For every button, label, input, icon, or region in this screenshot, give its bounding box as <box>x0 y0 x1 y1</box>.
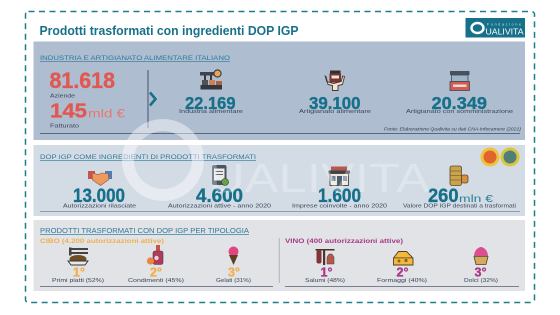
stat: valore DOP IGP <box>403 186 516 210</box>
icon: handshake <box>88 171 112 186</box>
watermark: Qualivita <box>128 125 431 201</box>
stat: fatturato <box>50 100 125 130</box>
stat: imprese coinvolte: Imprese coinvolte - anno 2020 <box>292 204 387 210</box>
panel: prodotti per tipologia <box>34 220 525 291</box>
item: dolci: Dolci (32%) <box>464 278 498 284</box>
stat: artigianato con somministrazione: Artigianato con somministrazione <box>406 109 513 115</box>
icon: cupcake <box>474 247 488 264</box>
stat: autorizzazioni rilasciate: Autorizzazioni rilasciate <box>63 204 136 210</box>
stat: fatturato: mld € <box>88 106 125 120</box>
icon: IGP seal <box>500 148 520 166</box>
panel heading: ingredienti: DOP IGP COME INGREDIENTI DI PRODOTTI TRASFORMATI <box>40 154 256 161</box>
icon: hands holding food <box>325 70 344 90</box>
item: salumi: Salumi (48%) <box>305 278 345 284</box>
item: condimenti: Condimenti (45%) <box>128 278 184 284</box>
item: gelati: 3° <box>228 266 240 280</box>
item: primi piatti <box>52 266 104 284</box>
item: dolci <box>464 266 498 284</box>
item: dolci: 3° <box>474 266 486 280</box>
stat: aziende: 81.618 <box>50 68 115 93</box>
stat: aziende: Aziende <box>50 94 75 100</box>
stat: fatturato: 145 <box>50 100 87 122</box>
item: salumi: 1° <box>320 266 332 280</box>
icon: factory line <box>200 70 222 90</box>
item: primi piatti: 1° <box>73 266 85 280</box>
icon: document with check <box>212 165 228 186</box>
stat: valore DOP IGP: mln € <box>459 193 493 205</box>
item: salumi <box>305 266 345 284</box>
item: condimenti <box>128 266 184 284</box>
stat: artigianato con somministrazione <box>406 93 513 115</box>
stat: industria alimentare: Industria alimentare <box>179 109 243 115</box>
stat: autorizzazioni attive <box>168 186 271 210</box>
stat: valore DOP IGP: Valore DOP IGP destinati a trasformati <box>403 204 516 210</box>
icon: coin stacks <box>450 166 468 186</box>
title: Prodotti trasformati con ingredienti DOP IGP <box>40 24 298 38</box>
item: condimenti: 2° <box>150 266 162 280</box>
stat: artigianato alimentare <box>299 93 371 115</box>
icon: food stall <box>450 71 470 90</box>
stat: imprese coinvolte: 1.600 <box>318 186 361 207</box>
icon: formaggio <box>394 252 413 265</box>
stat: autorizzazioni rilasciate: 13.000 <box>73 186 125 207</box>
vertical divider and chevron arrow <box>148 70 156 128</box>
stat: autorizzazioni attive: 4.600 <box>196 186 243 207</box>
item: formaggi: 2° <box>396 266 408 280</box>
logo: Fondazione Qualivita: UALIVITA <box>486 27 524 36</box>
panel heading: industria: INDUSTRIA E ARTIGIANATO ALIMENTARE ITALIANO <box>40 55 230 62</box>
watermark: Qualivita: UALIVITA <box>208 155 431 201</box>
icon: pasta <box>68 248 88 265</box>
page gaps between panels <box>34 140 525 220</box>
stat: artigianato alimentare: Artigianato alimentare <box>299 109 371 115</box>
item: gelati: Gelati (31%) <box>216 278 251 284</box>
item: formaggi: Formaggi (40%) <box>377 278 427 284</box>
icon: salumi <box>316 249 334 265</box>
item: gelati <box>216 266 251 284</box>
source note: Fonte: Elaborazione Qualivita su dati CNA-Infocamere (2021) <box>384 126 522 132</box>
stat: autorizzazioni attive: Autorizzazioni attive - anno 2020 <box>168 204 271 210</box>
icon: gelato <box>228 246 238 265</box>
logo: Fondazione Qualivita <box>466 18 525 38</box>
panel: industria e artigianato <box>34 42 525 140</box>
icon: shop building <box>328 166 350 186</box>
stat: fatturato: Fatturato <box>50 124 79 130</box>
subheading: vino: VINO (400 autorizzazioni attive) <box>285 238 403 245</box>
stat: artigianato con somministrazione: 20.349 <box>432 93 487 113</box>
stat: imprese coinvolte <box>292 186 387 210</box>
panel heading: tipologia: PRODOTTI TRASFORMATI CON DOP IGP PER TIPOLOGIA <box>40 228 249 235</box>
stat: valore DOP IGP: 260 <box>428 186 458 207</box>
stat: artigianato alimentare: 39.100 <box>309 93 361 113</box>
icon: condiment bottle <box>147 245 163 265</box>
item: formaggi <box>377 266 427 284</box>
stat: industria alimentare: 22.169 <box>185 93 236 113</box>
icon: DOP seal <box>480 148 500 166</box>
panel: DOP IGP come ingredienti <box>34 145 525 216</box>
logo: Fondazione Qualivita: Fondazione <box>487 22 521 26</box>
item: primi piatti: Primi piatti (52%) <box>52 278 104 284</box>
subheading: cibo: CIBO (4.200 autorizzazioni attive) <box>40 238 164 245</box>
